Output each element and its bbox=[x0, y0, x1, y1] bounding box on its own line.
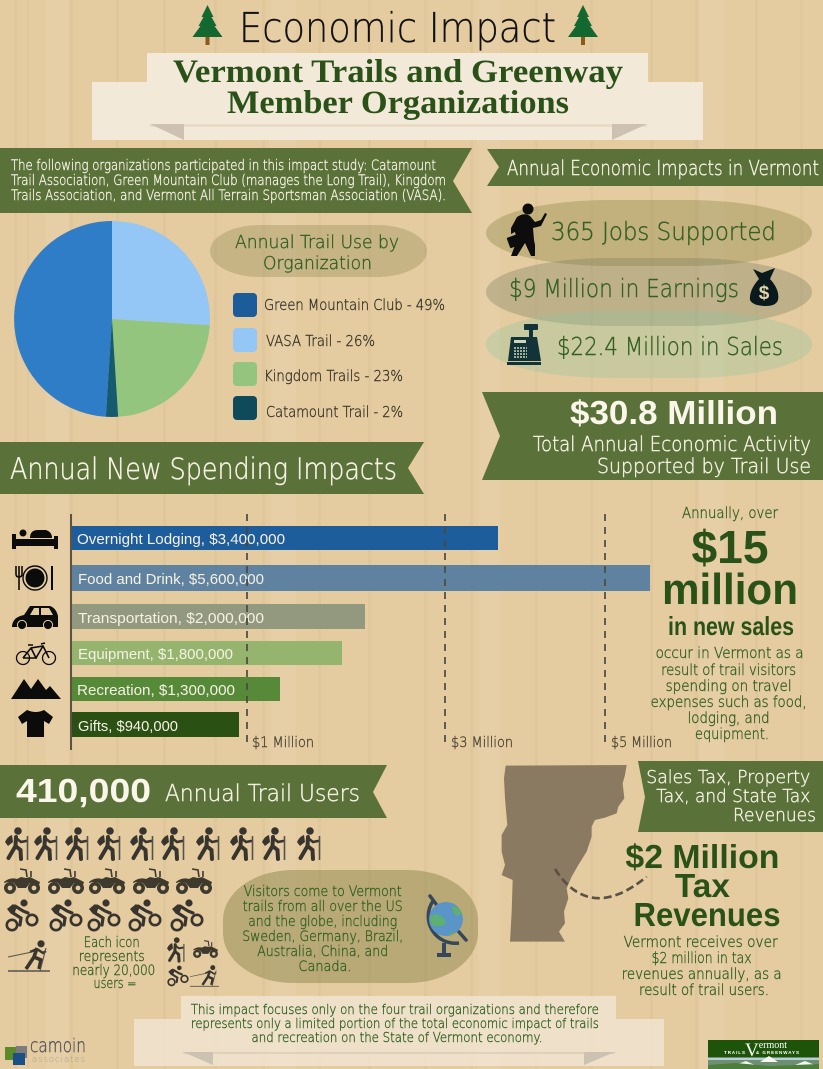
logo: Vermont Trails & Greenways: V bbox=[745, 1040, 759, 1061]
ribbon text: Revenues bbox=[733, 805, 816, 826]
pictogram: ATVs bbox=[4, 869, 212, 892]
callout intro: Annually, over bbox=[682, 504, 779, 522]
bubble text: Sweden, Germany, Brazil, bbox=[242, 929, 403, 945]
stat text: $9 Million in Earnings bbox=[509, 274, 739, 303]
title banner bbox=[92, 53, 703, 140]
bar: equipment: Equipment, $1,800,000 bbox=[78, 646, 233, 663]
bar: food and drink bbox=[72, 565, 650, 591]
bar: food and drink: Food and Drink, $5,600,000 bbox=[78, 571, 264, 588]
pictogram: hikers bbox=[5, 827, 320, 860]
icon: money bag bbox=[750, 268, 778, 306]
icon: mountains bbox=[11, 679, 61, 699]
stat: earnings bbox=[486, 258, 812, 326]
ribbon heading text: Annual New Spending Impacts bbox=[10, 452, 397, 486]
bubble text: trails from all over the US bbox=[243, 899, 403, 915]
callout figure: $15 bbox=[692, 521, 768, 573]
callout: tax revenues bbox=[622, 838, 789, 999]
pictogram key text: represents bbox=[79, 949, 145, 965]
pictogram: skier bbox=[8, 940, 50, 971]
legend item: Kingdom Trails bbox=[233, 362, 403, 386]
legend: annual trail use bbox=[210, 225, 445, 421]
icon: globe bbox=[428, 896, 466, 955]
icon: bicycle bbox=[16, 643, 56, 664]
stat text: $22.4 Million in Sales bbox=[557, 332, 783, 361]
bar: gifts: Gifts, $940,000 bbox=[78, 718, 178, 735]
stat: jobs bbox=[486, 200, 812, 266]
map: Vermont bbox=[502, 765, 627, 942]
axis label: $1 Million: $1 Million bbox=[252, 735, 314, 751]
impact stats bbox=[486, 200, 812, 378]
callout body: spending on travel bbox=[666, 677, 792, 695]
bubble text: Canada. bbox=[298, 959, 352, 975]
pictogram: cyclists bbox=[7, 899, 202, 930]
ribbon: annual new spending impacts bbox=[0, 442, 424, 494]
legend item: Catamount Trail bbox=[233, 396, 403, 421]
legend item: Green Mountain Club bbox=[233, 293, 445, 317]
icon: plate and cutlery bbox=[16, 566, 52, 590]
bar: recreation: Recreation, $1,300,000 bbox=[77, 682, 235, 699]
slice: Catamount 2% bbox=[106, 319, 118, 417]
ribbon text: The following organizations participated in this impact study: Catamount bbox=[11, 158, 436, 174]
legend title: Organization bbox=[263, 253, 372, 274]
callout body: expenses such as food, bbox=[651, 693, 807, 711]
pictogram key text: nearly 20,000 bbox=[72, 963, 155, 979]
bar: overnight lodging: Overnight Lodging, $3,400,000 bbox=[77, 531, 285, 548]
callout heading: $2 Million bbox=[625, 838, 779, 875]
logo: Vermont Trails & Greenways: TRAILS bbox=[724, 1050, 745, 1055]
legend item: Kingdom Trails: Kingdom Trails - 23% bbox=[264, 367, 403, 385]
logo: Vermont Trails & Greenways bbox=[708, 1040, 819, 1069]
bar chart: spending categories bbox=[70, 514, 672, 751]
bubble text: and the globe, including bbox=[248, 914, 397, 930]
ribbon: tax revenues heading bbox=[638, 761, 823, 832]
callout body: revenues annually, as a bbox=[622, 965, 782, 983]
title bbox=[192, 4, 598, 52]
callout heading: Revenues bbox=[634, 896, 780, 933]
icon: right tree bbox=[568, 5, 598, 45]
bubble text: Visitors come to Vermont bbox=[244, 884, 402, 900]
icon: t-shirt bbox=[18, 710, 53, 737]
bar: equipment bbox=[72, 641, 342, 665]
ribbon: annual trail users bbox=[0, 765, 387, 818]
bar: recreation bbox=[72, 677, 280, 701]
banner heading line 2: Member Organizations bbox=[227, 85, 569, 121]
icon: cash register bbox=[507, 324, 541, 365]
callout body: result of trail visitors bbox=[661, 661, 796, 679]
logo: Vermont Trails & Greenways: ermont bbox=[759, 1040, 787, 1051]
total figure: $30.8 Million bbox=[570, 394, 778, 431]
ribbon text: Tax, and State Tax bbox=[656, 786, 810, 807]
bar: overnight lodging bbox=[70, 526, 498, 550]
total caption: Supported by Trail Use bbox=[597, 454, 811, 478]
pictogram key text: users = bbox=[94, 976, 136, 992]
logo: Camoin Associates: camoin bbox=[30, 1035, 86, 1057]
callout body: Vermont receives over bbox=[624, 933, 778, 951]
bubble: visitors bbox=[223, 870, 478, 983]
bar: gifts bbox=[71, 712, 239, 737]
ribbon text: Trails Association, and Vermont All Terrain Sportsman Association (VASA). bbox=[11, 188, 446, 204]
callout heading: Tax bbox=[675, 867, 731, 904]
slice: Green Mountain Club 49% bbox=[14, 221, 112, 417]
ribbon: participating organizations bbox=[0, 148, 472, 213]
banner heading line 1: Vermont Trails and Greenway bbox=[173, 54, 624, 90]
logo: Camoin Associates: associates bbox=[32, 1055, 85, 1065]
legend item: Catamount Trail: Catamount Trail - 2% bbox=[266, 403, 403, 421]
users figure: 410,000 bbox=[16, 772, 151, 809]
heading: Economic Impact: Economic Impact bbox=[239, 4, 556, 52]
callout subhead: in new sales bbox=[668, 611, 794, 641]
bar: transportation: Transportation, $2,000,000 bbox=[78, 610, 264, 627]
legend item: VASA Trail: VASA Trail - 26% bbox=[266, 332, 375, 350]
pictogram key text: Each icon bbox=[84, 935, 140, 951]
legend title bubble bbox=[210, 225, 427, 277]
callout body: occur in Vermont as a bbox=[656, 644, 804, 662]
callout figure unit: million bbox=[662, 565, 798, 614]
axis label: $3 Million: $3 Million bbox=[451, 735, 513, 751]
bubble text: Australia, China, and bbox=[257, 944, 388, 960]
callout body: $2 million in tax bbox=[652, 949, 752, 967]
users caption: Annual Trail Users bbox=[165, 781, 360, 807]
ribbon: annual economic impacts heading bbox=[487, 149, 823, 186]
icon: money bag: $ bbox=[759, 283, 770, 304]
callout body: result of trail users. bbox=[639, 981, 769, 999]
ribbon text: Sales Tax, Property bbox=[646, 767, 810, 788]
pie chart: annual trail use bbox=[14, 221, 210, 417]
legend title: Annual Trail Use by bbox=[235, 232, 399, 253]
pictogram key icons bbox=[167, 937, 219, 986]
legend item: Green Mountain Club: Green Mountain Club - 49% bbox=[264, 296, 445, 314]
icon: left tree bbox=[192, 5, 222, 45]
arrow: dashed connector from map to tax revenues bbox=[555, 869, 647, 898]
footer banner bbox=[134, 996, 664, 1066]
stat text: 365 Jobs Supported bbox=[551, 217, 776, 246]
callout: new sales bbox=[651, 504, 811, 743]
footer text: represents only a limited portion of the total economic impact of trails bbox=[191, 1016, 599, 1032]
slice: VASA 26% bbox=[112, 221, 210, 325]
stat: sales bbox=[486, 311, 812, 378]
slice: Kingdom Trails 23% bbox=[112, 319, 210, 417]
icon: walking person with briefcase bbox=[507, 204, 547, 256]
axis label: $5 Million: $5 Million bbox=[611, 735, 672, 751]
bar: transportation bbox=[72, 604, 365, 629]
logo: Vermont Trails & Greenways: & GREENWAYS bbox=[756, 1050, 799, 1055]
callout body: equipment. bbox=[695, 725, 769, 743]
footer text: This impact focuses only on the four trail organizations and therefore bbox=[191, 1002, 599, 1018]
legend item: VASA Trail bbox=[233, 328, 375, 352]
ribbon text: Trail Association, Green Mountain Club (manages the Long Trail), Kingdom bbox=[11, 173, 446, 189]
callout body: lodging, and bbox=[688, 709, 770, 727]
logo: Camoin Associates bbox=[5, 1035, 86, 1065]
icon: bed bbox=[12, 530, 58, 549]
footer text: and recreation on the State of Vermont economy. bbox=[252, 1030, 542, 1046]
ribbon: total economic activity bbox=[482, 392, 823, 480]
icon: car bbox=[12, 606, 58, 630]
